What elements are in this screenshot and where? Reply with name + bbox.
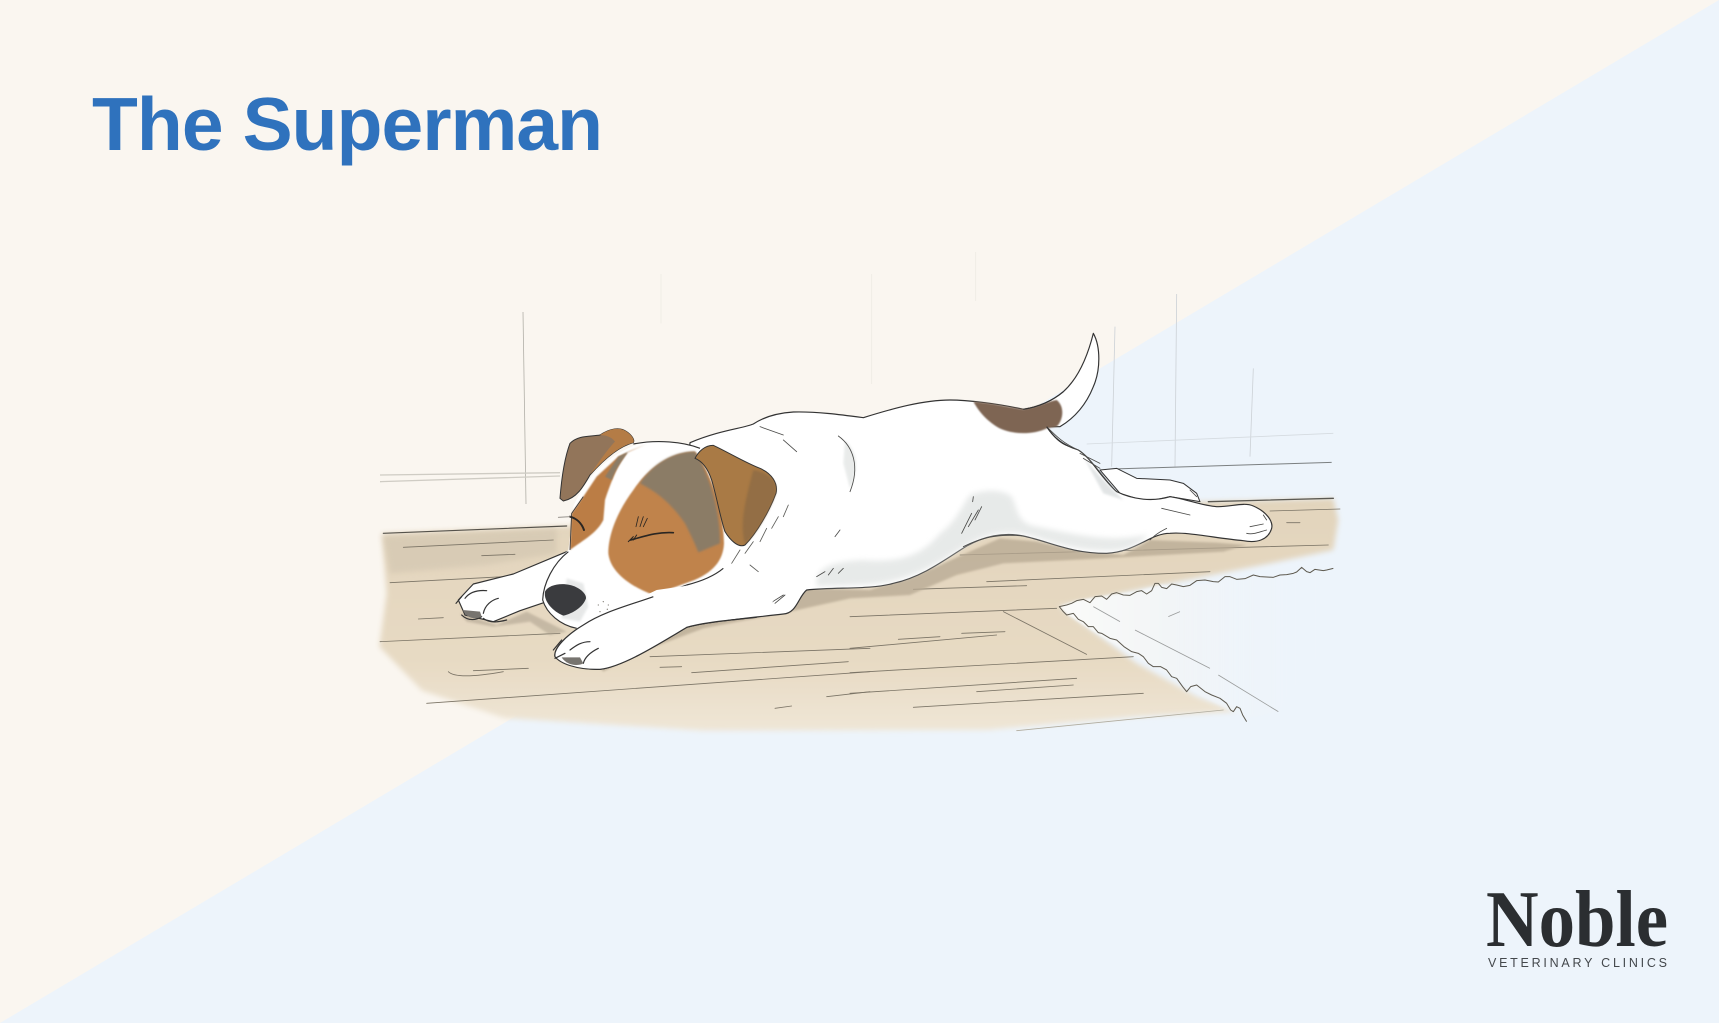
far hind leg	[1100, 468, 1200, 502]
logo: Noble Veterinary Clinics	[1486, 876, 1668, 970]
floorboard lines	[380, 498, 1340, 731]
floor darker wash at back left	[383, 528, 557, 573]
shadow under dog	[460, 538, 1247, 672]
muzzle shading	[562, 578, 588, 622]
tail patch	[973, 400, 1062, 433]
far ear	[560, 429, 634, 501]
nose	[545, 584, 586, 616]
illustration: sleeping dog in superman pose on wood floor	[379, 252, 1340, 731]
toes	[456, 591, 598, 663]
wall lines	[380, 252, 1333, 504]
logo tagline: VETERINARY CLINICS	[1488, 956, 1667, 970]
body lines	[760, 427, 1267, 603]
eyes	[558, 517, 673, 542]
body and near legs	[555, 333, 1272, 669]
wood floor	[379, 498, 1338, 731]
far side brown face patch	[570, 444, 647, 550]
rug fringe	[1059, 567, 1333, 722]
head	[543, 429, 776, 628]
title: The Superman	[92, 82, 603, 166]
near ear	[695, 445, 776, 546]
head base	[543, 441, 727, 628]
rug	[1059, 567, 1333, 722]
dog	[456, 333, 1272, 669]
whisker dots	[598, 601, 609, 612]
near ear shading	[743, 470, 776, 544]
near side brown face patch	[608, 452, 724, 595]
near foreleg over head	[555, 573, 783, 669]
far ear brown edge	[590, 429, 634, 475]
body shading	[817, 491, 1148, 587]
chest fur marks	[732, 505, 788, 572]
rug inner lines	[1093, 607, 1278, 712]
grey-brown head patch	[640, 452, 720, 552]
logo wordmark: Noble	[1486, 876, 1668, 964]
head outlines	[543, 442, 723, 628]
far front leg	[458, 552, 577, 622]
